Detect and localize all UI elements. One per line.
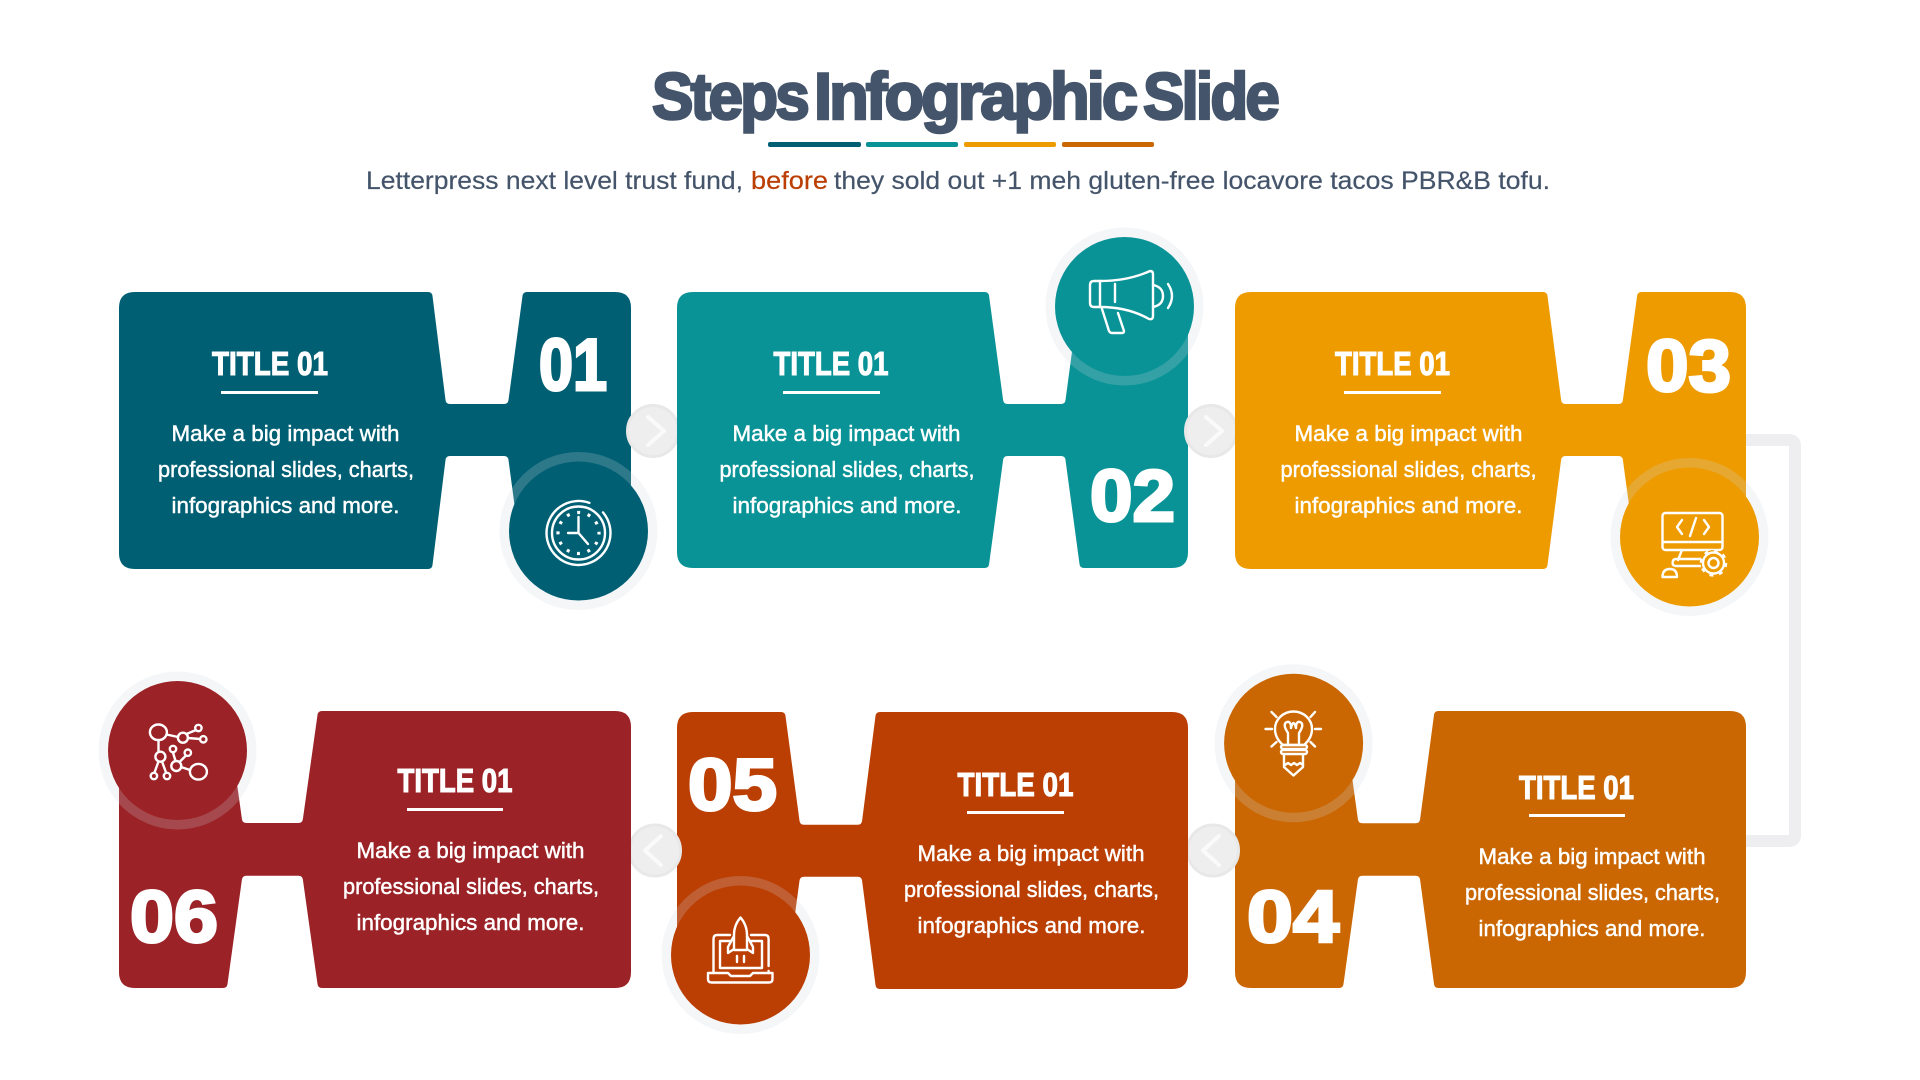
- heading rule 06: [407, 808, 503, 811]
- heading 06: TITLE 01: [398, 762, 512, 799]
- connector frame between step 3 and step 4: [1740, 440, 1795, 841]
- panel: step 06: [98, 672, 631, 988]
- card shape 05: [677, 712, 1188, 989]
- title: Infographic: [814, 59, 1136, 133]
- body text 03: [1280, 421, 1536, 518]
- arrow: step 4 to step 5: [1188, 825, 1238, 876]
- panel: step 04: [1215, 664, 1746, 988]
- card shape 04: [1235, 711, 1746, 988]
- subtitle: before: [751, 167, 828, 195]
- body text 06: infographics and more.: [356, 910, 584, 935]
- number 01: 01: [539, 325, 607, 406]
- number 03: 03: [1646, 326, 1731, 407]
- body text 06: [343, 838, 599, 935]
- arrow: step 1 to step 2: [628, 406, 678, 456]
- icon badge: light bulb pencil: [1215, 664, 1373, 822]
- title: Steps: [652, 59, 807, 133]
- body text 03: infographics and more.: [1294, 493, 1522, 518]
- heading 03: TITLE 01: [1335, 345, 1450, 382]
- body text 02: Make a big impact with: [732, 421, 960, 446]
- heading rule 04: [1529, 814, 1625, 817]
- body text 04: professional slides, charts,: [1465, 880, 1720, 905]
- body text 06: Make a big impact with: [356, 838, 584, 863]
- icon badge: rocket laptop: [662, 876, 820, 1034]
- title: [652, 59, 1278, 133]
- card shape 03: [1235, 292, 1746, 569]
- panel: step 05: [662, 712, 1188, 1034]
- body text 05: Make a big impact with: [918, 841, 1144, 866]
- body text 06: professional slides, charts,: [343, 874, 599, 899]
- icon badge: clock: [500, 452, 658, 610]
- panel: step 02: [677, 228, 1204, 568]
- body text 05: [904, 841, 1159, 938]
- icon badge: code monitor: [1610, 458, 1768, 616]
- body text 03: Make a big impact with: [1294, 421, 1522, 446]
- icon badge: network nodes: [98, 672, 256, 830]
- panel: step 03: [1235, 292, 1768, 616]
- arrow: step 2 to step 3: [1186, 406, 1236, 456]
- body text 03: professional slides, charts,: [1280, 457, 1536, 482]
- body text 01: infographics and more.: [172, 493, 400, 518]
- heading 02: TITLE 01: [774, 345, 888, 382]
- body text 04: [1465, 844, 1720, 941]
- title: Slide: [1143, 59, 1278, 133]
- card shape 02: [677, 292, 1188, 568]
- number 05: 05: [688, 745, 777, 826]
- body text 02: professional slides, charts,: [720, 457, 974, 482]
- body text 04: infographics and more.: [1478, 916, 1706, 941]
- arrow: step 5 to step 6: [630, 825, 680, 876]
- heading 01: TITLE 01: [212, 345, 328, 382]
- body text 01: Make a big impact with: [172, 421, 400, 446]
- number 06: 06: [130, 877, 218, 958]
- body text 04: Make a big impact with: [1478, 844, 1706, 869]
- number 04: 04: [1247, 877, 1339, 958]
- body text 05: infographics and more.: [918, 913, 1146, 938]
- subtitle: Letterpress next level trust fund,: [366, 167, 743, 195]
- heading 05: TITLE 01: [958, 766, 1074, 803]
- subtitle: they sold out +1 meh gluten-free locavore tacos PBR&B tofu.: [834, 167, 1550, 195]
- heading 04: TITLE 01: [1519, 769, 1634, 806]
- body text 01: professional slides, charts,: [158, 457, 414, 482]
- body text 02: infographics and more.: [732, 493, 962, 518]
- subtitle: [366, 167, 1550, 195]
- panel: step 01: [119, 292, 658, 610]
- body text 02: [720, 421, 974, 518]
- body text 01: [158, 421, 414, 518]
- number 02: 02: [1090, 456, 1175, 537]
- title underline bars: [768, 142, 1154, 147]
- card shape 01: [119, 292, 631, 569]
- body text 05: professional slides, charts,: [904, 877, 1159, 902]
- icon badge: megaphone: [1046, 228, 1204, 386]
- heading rule 03: [1344, 391, 1441, 394]
- heading rule 02: [783, 391, 880, 394]
- card shape 06: [119, 711, 631, 988]
- heading rule 05: [967, 811, 1064, 814]
- heading rule 01: [221, 391, 318, 394]
